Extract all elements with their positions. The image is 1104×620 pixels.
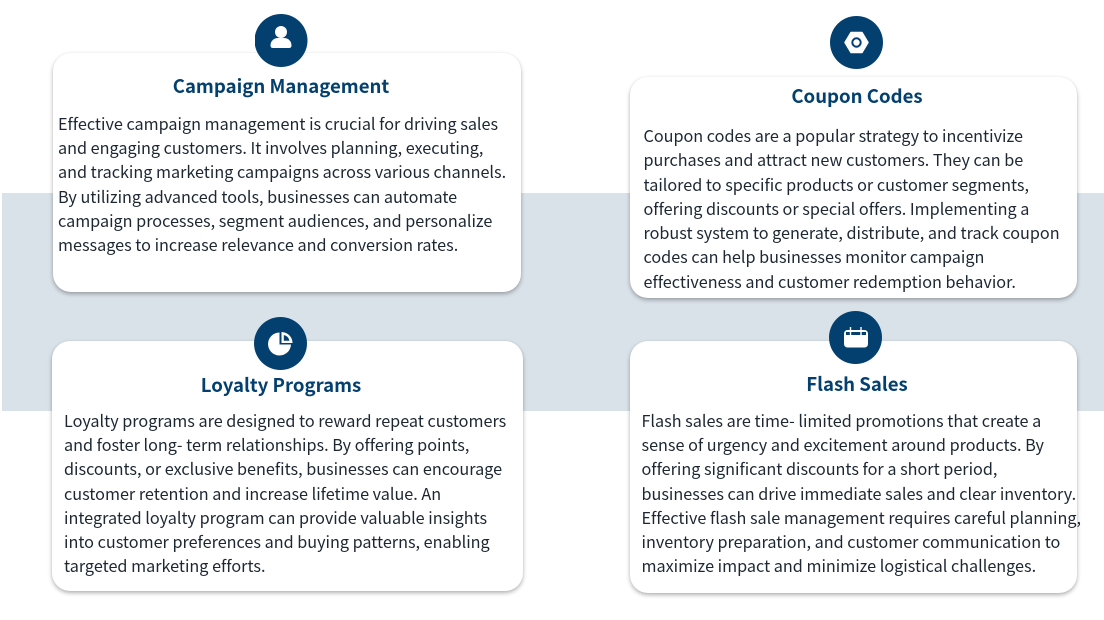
text: flash sales: sense of urgency and excitement around products. By <box>642 432 1044 456</box>
panel: coupon codes <box>630 77 1077 298</box>
text: campaign management: messages to increase relevance and conversion rates. <box>58 232 458 256</box>
text: flash sales: Flash sales are time- limited promotions that create a <box>642 408 1041 432</box>
text: loyalty programs: and foster long- term relationships. By offering points, <box>64 432 469 456</box>
text: loyalty programs: integrated loyalty program can provide valuable insights <box>64 505 487 529</box>
text: loyalty programs: targeted marketing efforts. <box>64 553 265 577</box>
heading: flash sales: Flash Sales <box>806 370 908 397</box>
text: flash sales: Effective flash sale management requires careful planning, <box>642 505 1081 529</box>
text: coupon codes: purchases and attract new customers. They can be <box>644 147 1023 171</box>
heading: campaign management: Campaign Management <box>173 72 389 99</box>
text: loyalty programs: Loyalty programs are designed to reward repeat customers <box>64 408 506 432</box>
text: campaign management: By utilizing advanced tools, businesses can automate <box>58 184 457 208</box>
icon: hex nut <box>830 16 883 69</box>
icon: calendar <box>829 311 882 364</box>
text: coupon codes: tailored to specific products or customer segments, <box>644 172 1029 196</box>
text: coupon codes: robust system to generate, distribute, and track coupon <box>644 220 1060 244</box>
text: campaign management: and engaging customers. It involves planning, executing, <box>58 135 483 159</box>
text: flash sales: inventory preparation, and customer communication to <box>642 529 1060 553</box>
text: coupon codes: effectiveness and customer redemption behavior. <box>644 269 1016 293</box>
heading: coupon codes: Coupon Codes <box>791 82 923 109</box>
text: campaign management: Effective campaign management is crucial for driving sales <box>58 111 498 135</box>
icon: person <box>255 14 308 67</box>
background band <box>2 193 1104 411</box>
panel: loyalty programs <box>52 341 523 591</box>
text: flash sales: businesses can drive immediate sales and clear inventory. <box>642 481 1076 505</box>
text: loyalty programs: customer retention and increase lifetime value. An <box>64 481 441 505</box>
text: coupon codes: Coupon codes are a popular strategy to incentivize <box>644 123 1023 147</box>
text: loyalty programs: discounts, or exclusive benefits, businesses can encourage <box>64 456 502 480</box>
text: coupon codes: offering discounts or special offers. Implementing a <box>644 196 1029 220</box>
text: campaign management: and tracking marketing campaigns across various channels. <box>58 159 506 183</box>
heading: loyalty programs: Loyalty Programs <box>201 371 361 398</box>
text: campaign management <box>58 111 506 256</box>
text: flash sales: maximize impact and minimize logistical challenges. <box>642 553 1036 577</box>
text: coupon codes <box>644 123 1060 293</box>
panel: flash sales <box>630 341 1077 593</box>
text: loyalty programs: into customer preferences and buying patterns, enabling <box>64 529 490 553</box>
icon: pie chart <box>254 317 307 370</box>
text: loyalty programs <box>64 408 506 577</box>
text: flash sales: offering significant discounts for a short period, <box>642 456 997 480</box>
panel: campaign management <box>53 53 521 292</box>
text: coupon codes: codes can help businesses monitor campaign <box>644 244 984 268</box>
text: campaign management: campaign processes, segment audiences, and personalize <box>58 208 492 232</box>
text: flash sales <box>642 408 1081 577</box>
